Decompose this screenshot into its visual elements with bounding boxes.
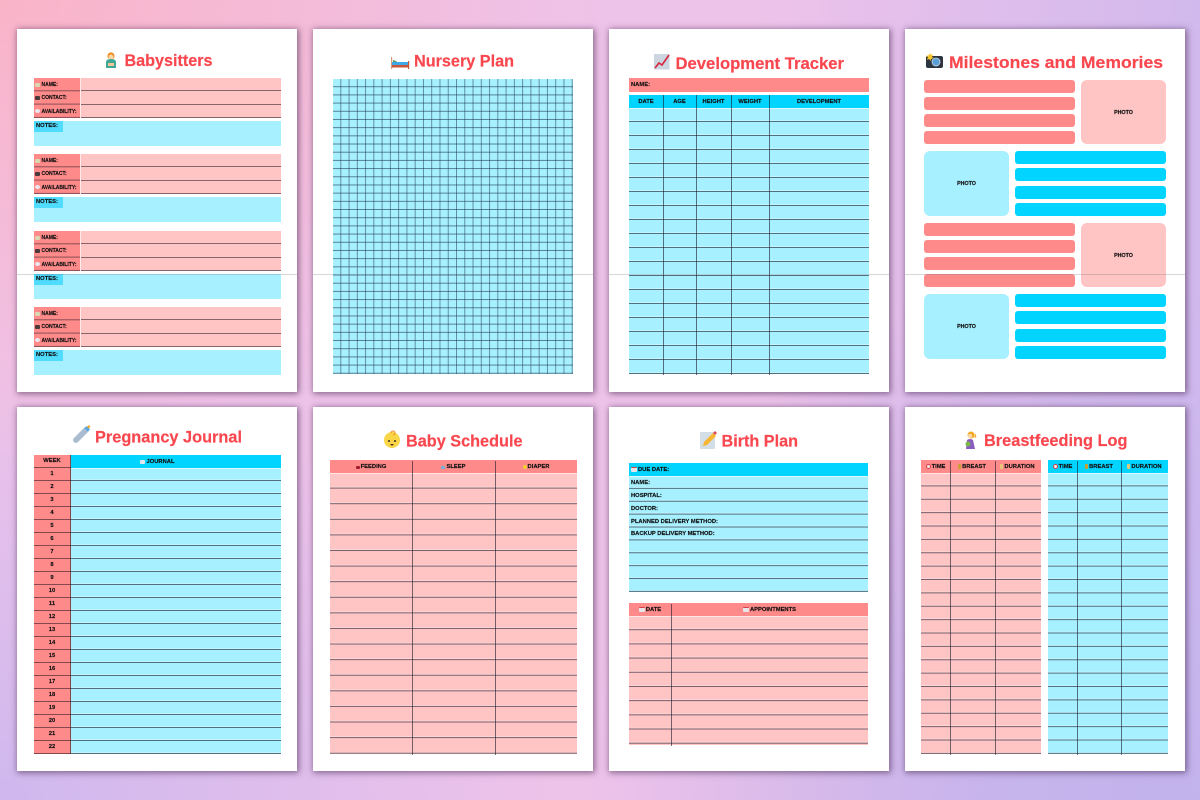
table header: DEVELOPMENT <box>797 99 841 105</box>
title: Baby Schedule: Baby Schedule <box>406 432 522 450</box>
contact block 2: CONTACT: <box>42 171 67 177</box>
right table header: TIME <box>1059 464 1072 470</box>
left table header: BREAST <box>962 464 986 470</box>
week column: 19 <box>49 705 55 711</box>
table header: FEEDING <box>361 464 386 470</box>
table header <box>629 95 869 108</box>
memory row 3: photo <box>1081 223 1166 287</box>
week column: 18 <box>49 692 55 698</box>
birth details rows: PLANNED DELIVERY METHOD: <box>631 518 718 524</box>
icon: baby face <box>384 431 400 448</box>
icon: breastfeeding woman <box>966 432 976 449</box>
contact block 3 <box>34 231 281 299</box>
appointments header <box>629 603 868 616</box>
birth details rows <box>629 476 868 592</box>
title: Birth Plan: Birth Plan <box>722 432 798 450</box>
contact block 3: NOTES: <box>36 276 58 282</box>
left table header: TIME <box>932 464 945 470</box>
journal rows <box>71 468 281 754</box>
week column: 8 <box>50 562 54 568</box>
left table header <box>921 460 1041 473</box>
contact block 4 <box>34 307 281 375</box>
page: Milestones and Memories <box>905 29 1185 392</box>
birth details rows: NAME: <box>631 480 650 486</box>
week column: 15 <box>49 653 55 659</box>
contact block 3: NAME: <box>42 235 58 241</box>
week column: WEEK <box>43 458 61 464</box>
title: Pregnancy Journal: Pregnancy Journal <box>95 428 242 446</box>
week column: 2 <box>50 484 54 490</box>
table header: DATE <box>638 99 654 105</box>
icon: chart <box>654 54 670 70</box>
memory row 3: lines <box>924 223 1075 287</box>
left table rows <box>921 473 1041 754</box>
title: Milestones and Memories: Milestones and Memories <box>949 53 1163 72</box>
week column: 12 <box>49 614 55 620</box>
schedule rows <box>330 473 577 754</box>
contact block 2 <box>34 154 281 222</box>
title: Nursery Plan: Nursery Plan <box>414 52 514 70</box>
week column: 5 <box>50 523 54 529</box>
page: Pregnancy Journal <box>17 407 297 771</box>
week column: 13 <box>49 627 55 633</box>
table header: WEIGHT <box>738 99 762 105</box>
week column: 6 <box>50 536 54 542</box>
birth details rows: BACKUP DELIVERY METHOD: <box>631 531 715 537</box>
week column: 7 <box>50 549 54 555</box>
week column <box>34 455 71 754</box>
week column: 22 <box>49 744 55 750</box>
table header: DIAPER <box>528 464 549 470</box>
memory row 4: photo <box>924 294 1009 359</box>
appointments header: DATE <box>646 607 661 613</box>
right table header <box>1048 460 1168 473</box>
memory row 4: lines <box>1015 294 1166 359</box>
page: Birth Plan <box>609 407 889 771</box>
table header <box>330 460 577 473</box>
right table rows <box>1048 473 1168 754</box>
week column: 10 <box>49 588 55 594</box>
icon: camera <box>926 53 943 68</box>
right table header: DURATION <box>1131 464 1162 470</box>
contact block 3: AVAILABILITY: <box>42 262 76 268</box>
table rows <box>629 108 869 374</box>
table header: SLEEP <box>446 464 466 470</box>
title: Babysitters: Babysitters <box>124 51 212 70</box>
table header: HEIGHT <box>703 99 724 105</box>
week column: 14 <box>49 640 55 646</box>
contact block 3: CONTACT: <box>42 248 67 254</box>
page: Nursery Plan <box>313 29 593 392</box>
icon: memo <box>700 431 717 449</box>
contact block 4: NOTES: <box>36 352 58 358</box>
table header: journal: JOURNAL <box>146 459 175 465</box>
title: Development Tracker: Development Tracker <box>676 54 844 73</box>
appointments header: APPOINTMENTS <box>750 607 796 613</box>
week column: 16 <box>49 666 55 672</box>
right table header: BREAST <box>1089 464 1113 470</box>
week column: 20 <box>49 718 55 724</box>
grid paper <box>333 79 573 374</box>
memory row 1: photo: PHOTO <box>1114 110 1133 116</box>
contact block 4: NAME: <box>42 311 58 317</box>
contact block 2: AVAILABILITY: <box>42 185 76 191</box>
contact block 4: CONTACT: <box>42 324 67 330</box>
memory row 2: photo: PHOTO <box>957 181 976 187</box>
contact block 1 <box>34 78 281 146</box>
table header: journal <box>71 455 281 468</box>
memory row 3: photo: PHOTO <box>1114 253 1133 259</box>
page: Development Tracker <box>609 29 889 392</box>
memory row 2: photo <box>924 151 1009 216</box>
name bar: NAME: <box>631 82 650 88</box>
contact block 1: AVAILABILITY: <box>42 109 76 115</box>
memory row 2: lines <box>1015 151 1166 216</box>
week column: 21 <box>49 731 55 737</box>
page: Breastfeeding Log <box>905 407 1185 771</box>
memory row 1: photo <box>1081 80 1166 144</box>
due date bar: DUE DATE: <box>638 467 669 473</box>
due date bar <box>629 463 868 476</box>
birth details rows: HOSPITAL: <box>631 493 662 499</box>
page: Baby Schedule <box>313 407 593 771</box>
contact block 4: AVAILABILITY: <box>42 338 76 344</box>
contact block 2: NOTES: <box>36 199 58 205</box>
birth details rows: DOCTOR: <box>631 506 658 512</box>
week column: 4 <box>50 510 54 516</box>
memory row 4: photo: PHOTO <box>957 324 976 330</box>
contact block 1: CONTACT: <box>42 95 67 101</box>
week column: 17 <box>49 679 55 685</box>
name bar <box>629 78 869 92</box>
left table header: DURATION <box>1004 464 1035 470</box>
icon: bottle <box>73 425 90 443</box>
contact block 1: NAME: <box>42 82 58 88</box>
icon: bed <box>391 57 409 69</box>
table header: AGE <box>673 99 686 105</box>
week column: 1 <box>50 471 54 477</box>
contact block 2: NAME: <box>42 158 58 164</box>
memory row 1: lines <box>924 80 1075 144</box>
title: Breastfeeding Log: Breastfeeding Log <box>984 431 1128 450</box>
page: Babysitters <box>17 29 297 392</box>
week column: 11 <box>49 601 55 607</box>
week column: 9 <box>50 575 54 581</box>
icon: babysitter <box>106 52 116 68</box>
appointments rows <box>629 616 868 745</box>
contact block 1: NOTES: <box>36 123 58 129</box>
week column: 3 <box>50 497 54 503</box>
